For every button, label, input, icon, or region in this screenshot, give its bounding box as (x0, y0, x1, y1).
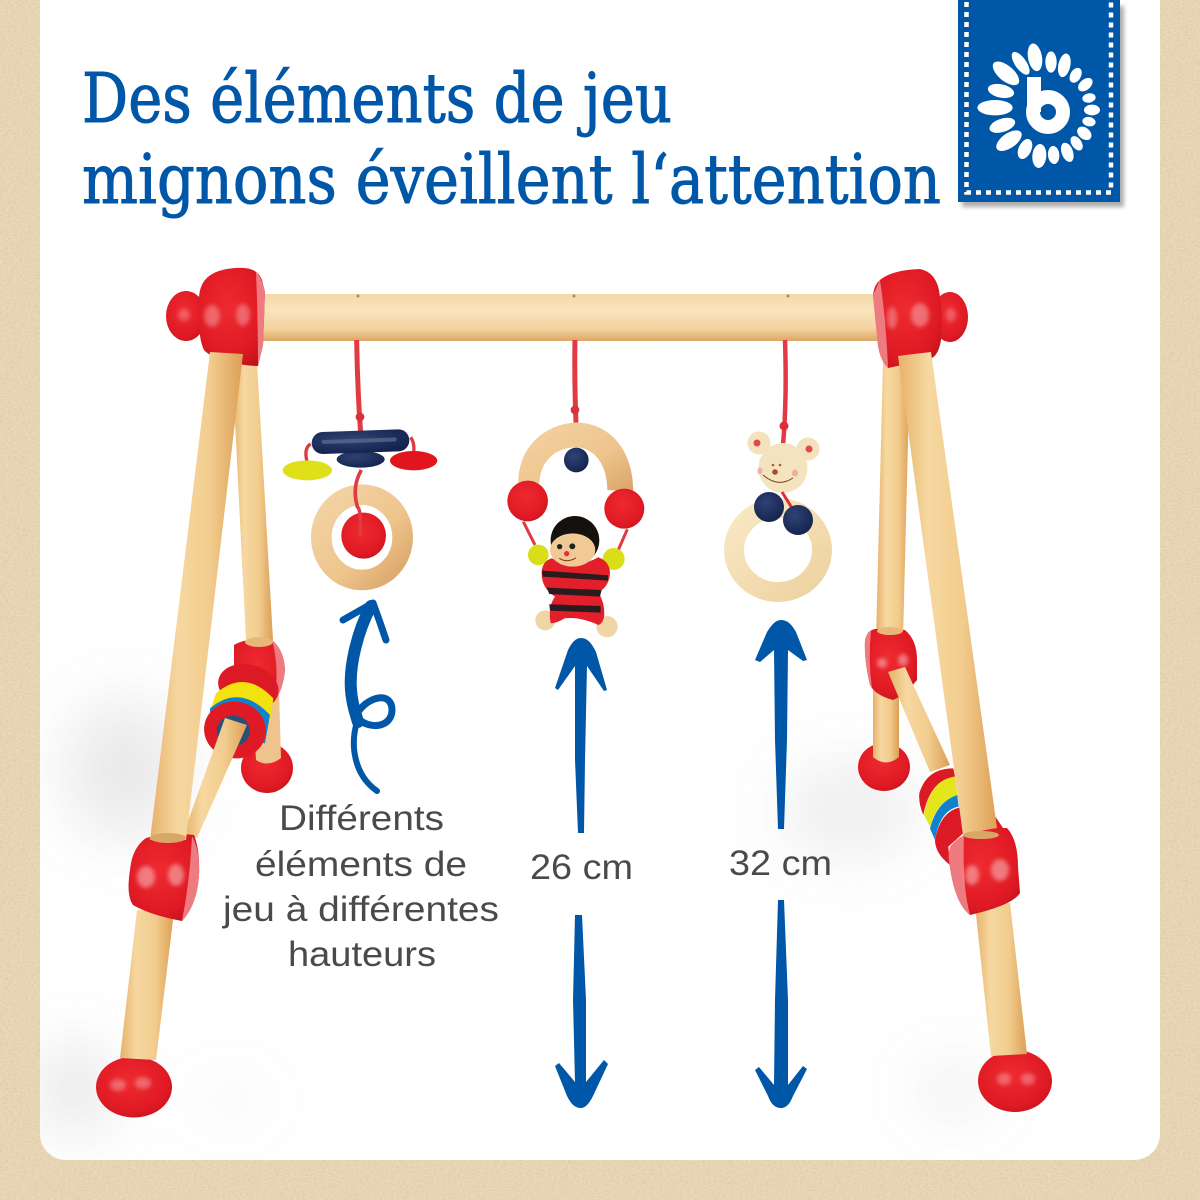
label: different play elements: jeu à différentes (222, 890, 499, 929)
top bar (250, 294, 890, 341)
title: mignons éveillent l‘attention (82, 141, 941, 220)
front left leg upper (150, 352, 243, 843)
toy gym frame (96, 268, 1052, 1118)
label: different play elements: éléments de (255, 845, 467, 884)
title: Des éléments de jeu (82, 60, 672, 139)
toys: hanging play elements (283, 340, 644, 637)
label: different play elements (222, 799, 499, 974)
front right leg upper (898, 352, 998, 835)
back left leg (232, 362, 293, 793)
toy 2: ladybird on arch (507, 340, 644, 637)
back right leg (858, 362, 917, 791)
arrow: 26 cm height (555, 638, 608, 1108)
floor shadows (40, 700, 995, 1135)
top right corner (873, 269, 968, 368)
front right foot (978, 1050, 1052, 1112)
label: 32 cm: 32 cm (729, 844, 832, 883)
front left leg lower (120, 910, 174, 1060)
top left corner (166, 268, 265, 366)
arrow: 32 cm height (755, 620, 807, 1108)
front left joint (129, 834, 199, 921)
right cross bar (888, 667, 950, 772)
logo: bieco label (958, 0, 1124, 207)
toy 1: bar, discs and ring (283, 340, 437, 580)
logo flower (977, 42, 1100, 169)
left abacus beads (200, 657, 284, 763)
right abacus beads (919, 768, 1003, 865)
title (82, 60, 941, 220)
label: 26 cm: 26 cm (530, 848, 633, 887)
label: different play elements: Différents (279, 799, 444, 838)
logo letter b (1033, 77, 1063, 127)
front left foot (96, 1056, 172, 1118)
front right leg lower (975, 903, 1027, 1056)
front right joint (949, 828, 1020, 915)
left cross bar (183, 718, 247, 838)
curly blue arrow (343, 603, 392, 791)
toy 3: mouse with ring (734, 340, 822, 592)
label: different play elements: hauteurs (288, 935, 436, 974)
